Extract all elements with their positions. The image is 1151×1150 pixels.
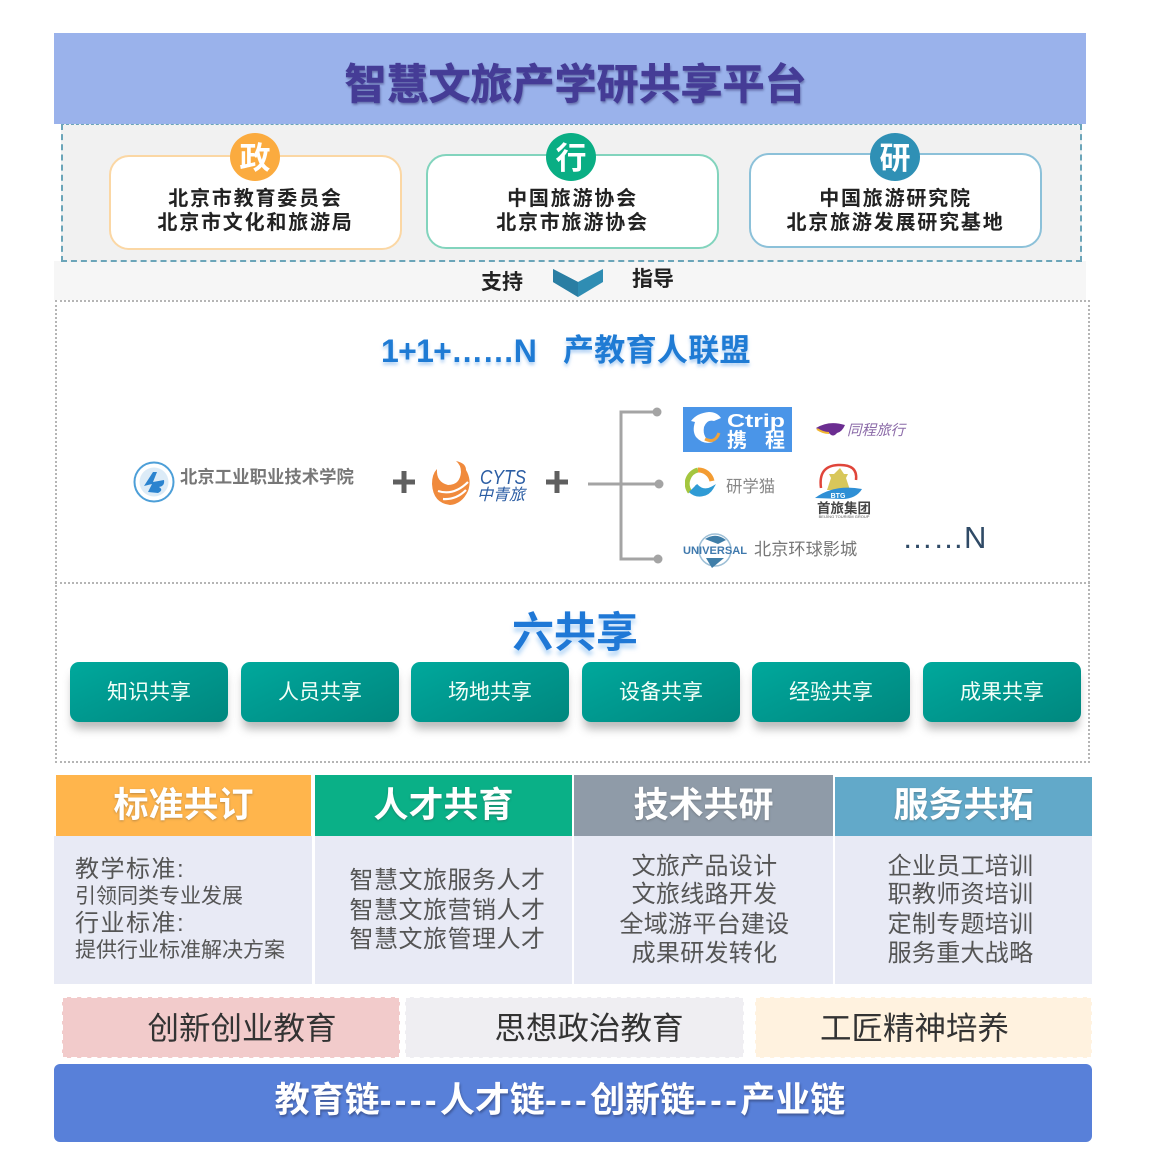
pill: ideological education: 思想政治教育 [494,1010,684,1046]
column: technology: 文旅产品设计 [632,853,777,880]
button: experience sharing [752,662,910,722]
button: experience sharing: 经验共享 [789,681,873,704]
column: standards: 引领同类专业发展 [75,885,243,908]
column: standards: 提供行业标准解决方案 [75,939,285,962]
header: service [835,777,1092,836]
column: technology: 文旅线路开发 [632,881,777,908]
column: service [835,836,1092,984]
column: talent [315,836,572,984]
logo: CYTS: CYTS [480,467,527,489]
logo: Tongcheng Travel [816,422,907,439]
logo: Universal Beijing Resort: 北京环球影城 [754,539,857,559]
logo: BTG: 首旅集团 [817,500,871,516]
card text: government: 北京市文化和旅游局 [157,212,354,234]
strip behind support and guidance row [54,261,1086,300]
icon: chevron down [553,269,603,297]
column: technology: 成果研发转化 [632,940,777,967]
badge: industry: 行 [556,141,586,176]
title band [54,33,1086,124]
column: technology [574,836,833,984]
logo: CYTS [432,461,527,505]
column: service: 定制专题培训 [888,911,1033,938]
header: standards: 标准共订 [113,786,254,825]
card text: government [157,188,354,234]
button: knowledge sharing [70,662,228,722]
logo: BTG: BTG [831,493,846,500]
button: personnel sharing [241,662,399,722]
alliance formula: 1+1+……N [381,333,536,369]
column: service: 服务重大战略 [888,940,1033,967]
card text: industry: 中国旅游协会 [507,188,638,210]
divider [55,582,1090,584]
card text: industry [496,188,649,234]
card: research [749,153,1042,248]
logo: Tongcheng Travel: 同程旅行 [847,422,907,439]
sharing heading: 六共享 [512,609,638,656]
chain text: 教育链----人才链---创新链---产业链 [275,1081,845,1120]
label: guidance: 指导 [632,268,674,291]
button: results sharing [923,662,1081,722]
card: government [109,155,402,250]
card: industry [426,154,719,249]
logo: Yanxuemao [685,468,775,497]
panel: alliance and sharing dotted frame [55,300,1090,763]
logo: Ctrip: Ctrip [727,411,785,431]
button: venue sharing [411,662,569,722]
header: service: 服务共拓 [893,786,1034,825]
bracket connector [588,408,664,564]
badge: government: 政 [240,141,270,176]
card text: industry: 北京市旅游协会 [496,212,649,234]
button: equipment sharing [582,662,740,722]
badge: research [870,133,920,181]
logo: Universal Beijing Resort [683,533,857,568]
badge: government [230,133,280,181]
button: venue sharing: 场地共享 [448,681,532,704]
card text: research: 北京旅游发展研究基地 [786,212,1004,234]
pill: innovation education [62,997,400,1058]
column: standards: 行业标准: [75,910,185,937]
card text: government: 北京市教育委员会 [168,188,343,210]
header: talent [315,775,572,836]
alliance heading [381,333,751,369]
bottom chain bar [54,1064,1092,1142]
badge: industry [546,133,596,181]
alliance name: 产教育人联盟 [563,333,751,368]
column: standards [54,836,312,984]
header: standards [56,775,311,836]
logo: Ctrip [683,407,792,452]
column: technology: 全域游平台建设 [619,911,790,938]
pill: ideological education [405,997,744,1058]
logo: Yanxuemao: 研学猫 [726,478,775,496]
logo: Beijing Polytechnic [134,462,354,502]
logo: BTG [815,464,871,519]
ellipsis N: ……N [902,520,986,555]
pill: craftsmanship [755,997,1092,1058]
logo: Beijing Polytechnic: 北京工业职业技术学院 [180,467,354,487]
plus sign [546,471,568,493]
logo: BTG: BEIJING TOURISM GROUP [819,514,870,519]
logo: CYTS: 中青旅 [477,486,527,504]
header: talent: 人才共育 [373,786,514,825]
column: talent: 智慧文旅管理人才 [350,926,546,953]
plus sign [393,471,415,493]
title: 智慧文旅产学研共享平台 [344,61,806,108]
column: standards: 教学标准: [75,856,185,883]
button: results sharing: 成果共享 [960,681,1044,704]
button: equipment sharing: 设备共享 [619,681,703,704]
label: support: 支持 [481,271,523,294]
badge: research: 研 [880,141,910,176]
column: service: 职教师资培训 [888,881,1033,908]
column: talent: 智慧文旅服务人才 [350,867,546,894]
button: personnel sharing: 人员共享 [278,681,362,704]
logo: Universal Beijing Resort: UNIVERSAL [683,545,747,557]
pill: innovation education: 创新创业教育 [147,1010,336,1046]
card text: research: 中国旅游研究院 [819,188,972,210]
column: service: 企业员工培训 [888,853,1033,880]
card text: research [786,188,1004,234]
button: knowledge sharing: 知识共享 [107,681,191,704]
header: technology: 技术共研 [633,786,774,825]
column: talent: 智慧文旅营销人才 [350,897,546,924]
pill: craftsmanship: 工匠精神培养 [820,1010,1009,1046]
panel: government, industry, research [61,124,1082,262]
header: technology [574,775,833,836]
